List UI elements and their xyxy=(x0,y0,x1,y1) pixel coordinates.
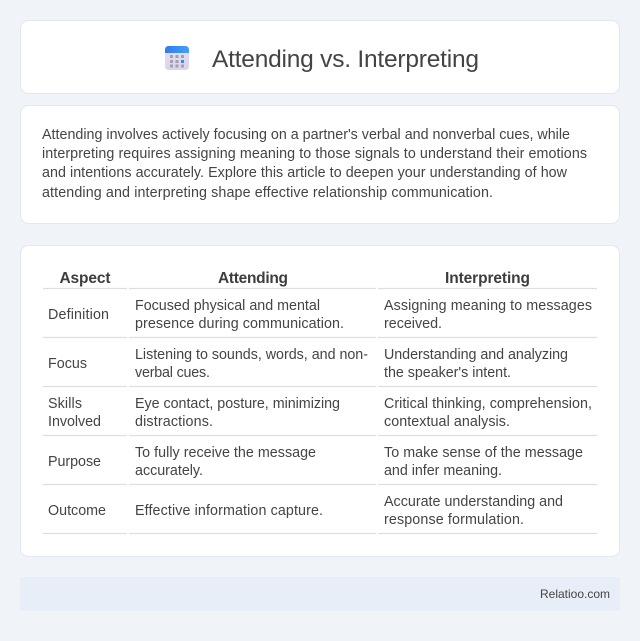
table row: Focus: verbal cues. xyxy=(135,365,210,381)
table row: Definition: received. xyxy=(384,316,442,332)
table row: Outcome: Effective information capture. xyxy=(135,503,323,519)
table row: Definition: Assigning meaning to messages xyxy=(384,298,592,314)
table row: Purpose xyxy=(43,445,597,484)
table row: Outcome: Accurate understanding and xyxy=(384,494,563,510)
table header row xyxy=(43,270,597,288)
icon: calendar xyxy=(165,46,189,70)
table row: Outcome xyxy=(43,494,597,534)
table row: Skills Involved: Skills xyxy=(48,396,82,412)
table row: Skills Involved: Eye contact, posture, minimizing xyxy=(135,396,340,412)
table row: Purpose: To make sense of the message xyxy=(384,445,583,461)
table row: Definition: Definition xyxy=(48,307,109,323)
table row: Outcome: response formulation. xyxy=(384,512,524,528)
table row: Definition: presence during communication. xyxy=(135,316,344,332)
panel: title header xyxy=(20,20,620,94)
table row: Definition xyxy=(43,298,597,338)
title: Attending vs. Interpreting xyxy=(212,46,479,73)
text block: introduction paragraph: interpreting requires assigning meaning to those signals to understand their emotions xyxy=(42,146,587,162)
table row: Focus: Understanding and analyzing xyxy=(384,347,568,363)
table row: Purpose: To fully receive the message xyxy=(135,445,316,461)
text block: introduction paragraph: Attending involves actively focusing on a partner's verbal and nonverbal cues, while xyxy=(42,127,570,143)
table row: Skills Involved xyxy=(43,396,597,436)
table row: Outcome: Outcome xyxy=(48,503,106,519)
table header row: Aspect xyxy=(60,270,110,287)
table row: Focus xyxy=(43,347,597,386)
table row: Purpose: Purpose xyxy=(48,454,101,470)
footer: Relatioo.com xyxy=(540,587,610,601)
table row: Purpose: accurately. xyxy=(135,463,203,479)
table row: Focus: Focus xyxy=(48,356,87,372)
table row: Purpose: and infer meaning. xyxy=(384,463,502,479)
table row: Skills Involved: Critical thinking, comprehension, xyxy=(384,396,592,412)
text block: introduction paragraph: and intentions accurately. Explore this article to deepen your understanding of how xyxy=(42,165,568,181)
table header row: Attending xyxy=(218,270,288,287)
panel: comparison table xyxy=(20,246,620,556)
table row: Skills Involved: contextual analysis. xyxy=(384,414,510,430)
footer xyxy=(20,577,620,611)
table row: Focus: Listening to sounds, words, and non- xyxy=(135,347,368,363)
text block: introduction paragraph xyxy=(42,127,587,201)
table row: Skills Involved: distractions. xyxy=(135,414,213,430)
table header row: Interpreting xyxy=(445,270,530,287)
table row: Focus: the speaker's intent. xyxy=(384,365,511,381)
table row: Definition: Focused physical and mental xyxy=(135,298,320,314)
text block: introduction paragraph: attending and interpreting shape effective relationship communication. xyxy=(42,185,493,201)
table row: Skills Involved: Involved xyxy=(48,414,101,430)
panel: introduction xyxy=(20,106,620,224)
